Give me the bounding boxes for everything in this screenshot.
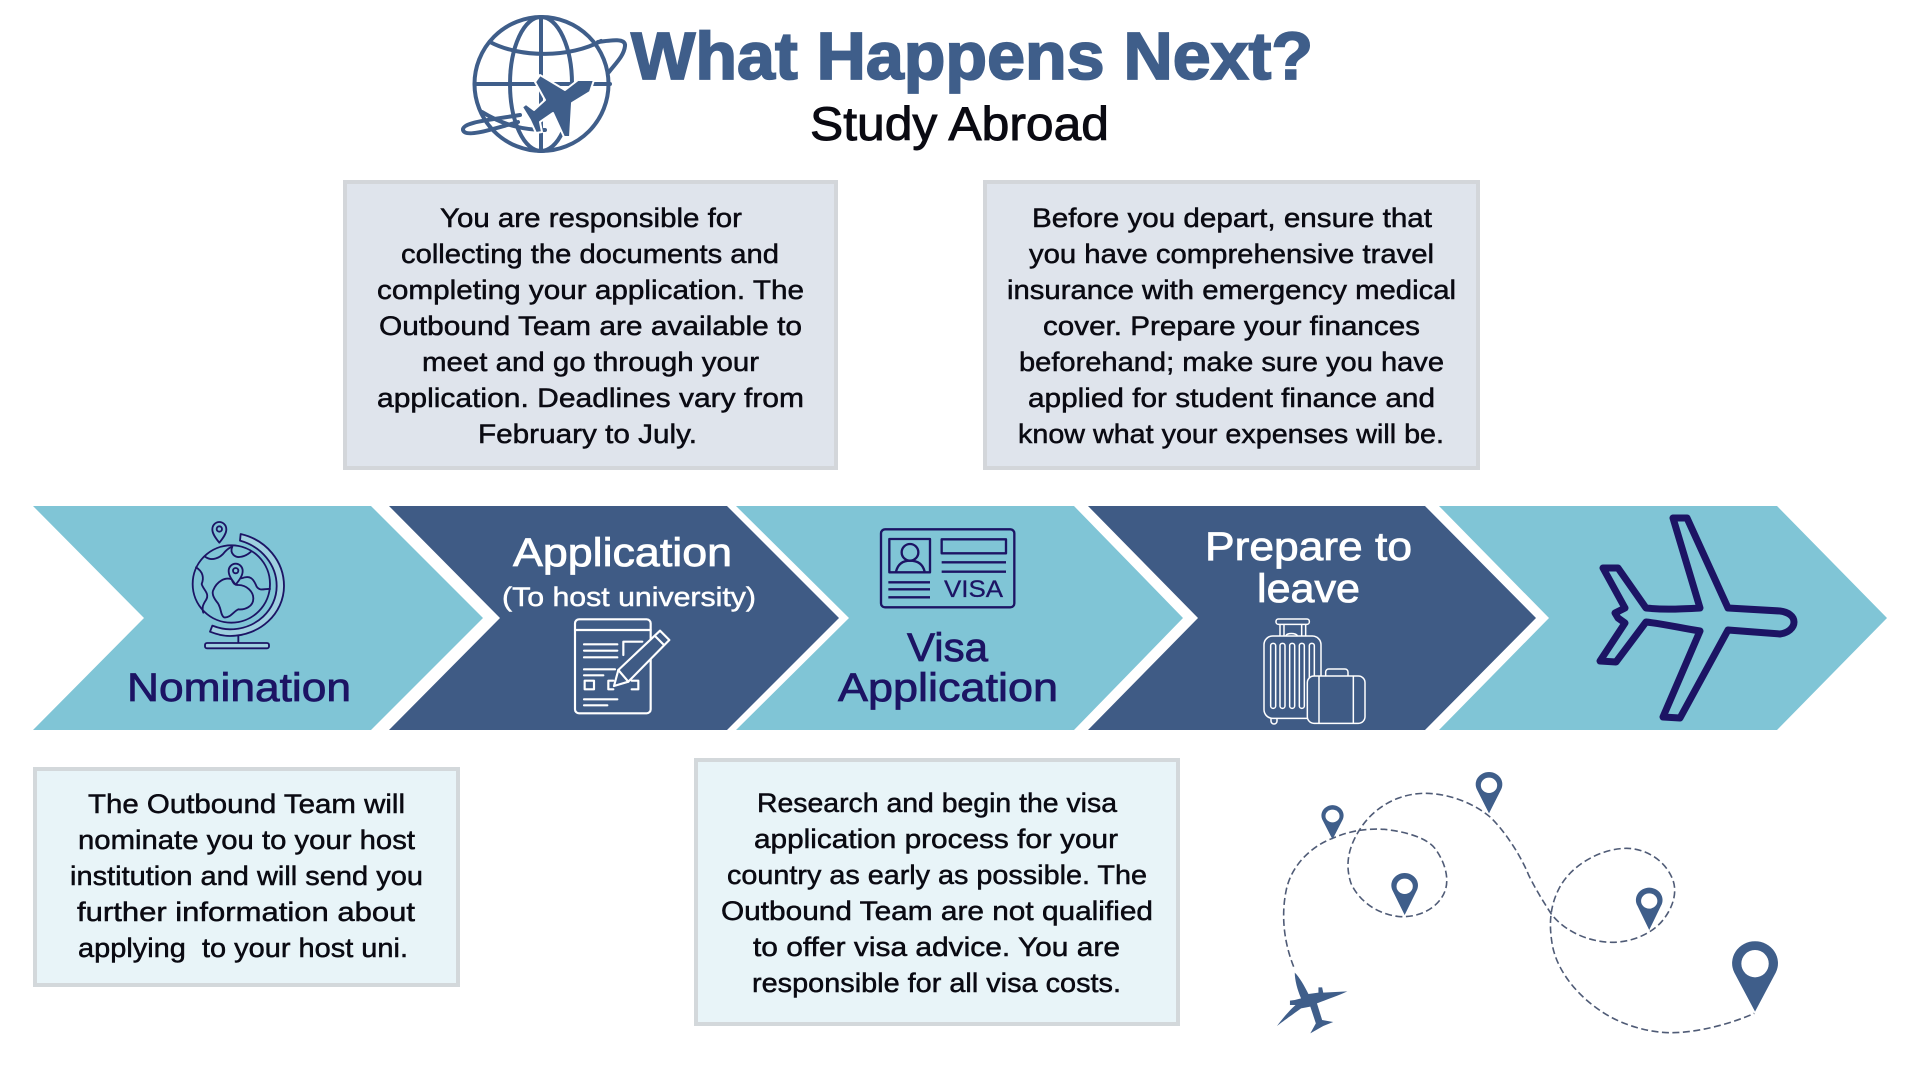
panel: application info box: Outbound Team are available to bbox=[379, 311, 802, 341]
panel: application info box: collecting the documents and bbox=[401, 239, 779, 269]
panel: visa info box: Research and begin the visa bbox=[757, 788, 1118, 818]
label: to host university: (To host university) bbox=[502, 582, 756, 612]
route: dashed path bbox=[1284, 793, 1754, 1033]
label: application: Application bbox=[838, 666, 1058, 710]
panel: prepare to leave info box: applied for student finance and bbox=[1028, 383, 1435, 413]
icon: plane outline bbox=[1600, 518, 1794, 718]
title: What Happens Next? bbox=[631, 19, 1313, 94]
panel: nomination info box: institution and will send you bbox=[70, 861, 423, 891]
icon: small plane bbox=[1277, 973, 1347, 1033]
chevron: nomination bbox=[33, 506, 483, 730]
label: prepare to: Prepare to bbox=[1205, 525, 1412, 569]
icon: desk globe with pins bbox=[193, 522, 284, 648]
icon: globe with orbiting plane logo bbox=[463, 17, 625, 151]
panel: visa info box: application process for your bbox=[754, 824, 1118, 854]
icon: pin 2 bbox=[1476, 772, 1502, 813]
icon: pin 4 bbox=[1636, 888, 1663, 930]
panel: nomination info box: The Outbound Team will bbox=[88, 789, 405, 819]
panel: prepare to leave info box bbox=[985, 182, 1478, 468]
panel: prepare to leave info box: you have comprehensive travel bbox=[1029, 239, 1434, 269]
panel: application info box: You are responsible for bbox=[440, 203, 742, 233]
icon: destination pin bbox=[1732, 941, 1778, 1012]
panel: visa info box: country as early as possible. The bbox=[727, 860, 1147, 890]
panel: prepare to leave info box: insurance with emergency medical bbox=[1007, 275, 1456, 305]
map: dashed flight route with pins and plane bbox=[1277, 772, 1778, 1033]
icon: pin 1 bbox=[1321, 805, 1344, 839]
icon text: visa: VISA bbox=[944, 576, 1003, 603]
icon: luggage bbox=[1264, 619, 1365, 724]
panel: nomination info box: further information about bbox=[77, 897, 416, 927]
panel: visa info box: responsible for all visa costs. bbox=[752, 968, 1121, 998]
panel: application info box: meet and go through your bbox=[422, 347, 759, 377]
label: visa: Visa bbox=[907, 626, 989, 670]
chevron: visa application bbox=[736, 506, 1183, 730]
panel: application info box: application. Deadlines vary from bbox=[377, 383, 804, 413]
label: application: Application bbox=[513, 531, 732, 575]
panel: visa info box: Outbound Team are not qualified bbox=[721, 896, 1153, 926]
panel: nomination info box bbox=[35, 769, 458, 985]
panel: prepare to leave info box: beforehand; make sure you have bbox=[1019, 347, 1444, 377]
chevron: prepare to leave bbox=[1088, 506, 1536, 730]
panel: application info box bbox=[345, 182, 836, 468]
panel: prepare to leave info box: Before you depart, ensure that bbox=[1032, 203, 1433, 233]
icon: pin 3 bbox=[1391, 873, 1418, 915]
icon: visa card bbox=[881, 529, 1014, 607]
panel: visa info box bbox=[696, 760, 1178, 1024]
panel: application info box: completing your application. The bbox=[377, 275, 804, 305]
panel: prepare to leave info box: know what your expenses will be. bbox=[1018, 419, 1444, 449]
chevron: departure bbox=[1439, 506, 1887, 730]
label: nomination: Nomination bbox=[127, 666, 351, 710]
subtitle: Study Abroad bbox=[810, 97, 1109, 150]
panel: nomination info box: nominate you to your host bbox=[78, 825, 416, 855]
icon: application form and pencil bbox=[575, 619, 669, 713]
label: leave: leave bbox=[1257, 567, 1360, 611]
panel: visa info box: to offer visa advice. You are bbox=[753, 932, 1120, 962]
panel: nomination info box: applying to your host uni. bbox=[78, 933, 408, 963]
panel: application info box: February to July. bbox=[478, 419, 697, 449]
panel: prepare to leave info box: cover. Prepare your finances bbox=[1043, 311, 1420, 341]
chevron: application bbox=[389, 506, 839, 730]
